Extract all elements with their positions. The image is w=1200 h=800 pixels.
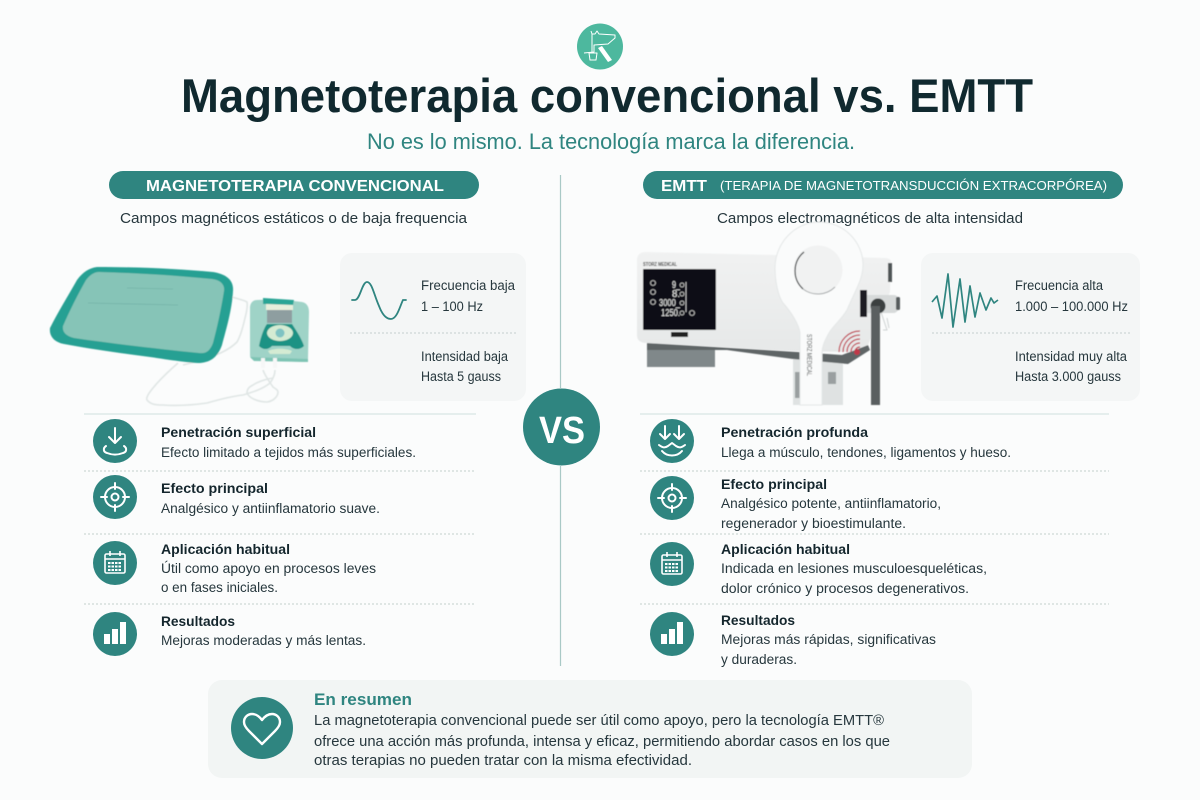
machine brand label: STORZ MEDICAL (643, 262, 677, 268)
row: penetración profunda: Penetración profunda (721, 424, 868, 440)
summary heading: En resumen (314, 690, 412, 709)
icon: high frequency wave (932, 274, 998, 327)
row: aplicación habitual: Útil como apoyo en procesos leves (161, 561, 376, 576)
row: resultados: Resultados (161, 613, 235, 629)
machine display readings: 3000_ (659, 298, 680, 309)
row: resultados (93, 612, 366, 656)
row: aplicación habitual EMTT: Indicada en lesiones musculoesqueléticas, (721, 561, 987, 576)
row: efecto principal: Efecto principal (161, 480, 268, 496)
VS badge: VS (539, 410, 585, 452)
row: aplicación habitual EMTT (650, 541, 987, 596)
row: efecto principal EMTT: regenerador y bioestimulante. (721, 516, 906, 531)
panel: magnetoterapia convencional (50, 171, 526, 656)
row: resultados EMTT: Mejoras más rápidas, significativas (721, 632, 936, 647)
row: resultados EMTT: y duraderas. (721, 652, 797, 667)
icon: target (650, 476, 694, 520)
machine display readings: 1250. (661, 308, 680, 319)
text: intensidad baja (421, 349, 508, 384)
text: intensidad baja: Intensidad baja (421, 349, 508, 364)
row: aplicación habitual EMTT: dolor crónico y procesos degenerativos. (721, 581, 969, 596)
subheading: campos magnéticos: Campos magnéticos estáticos o de baja frequencia (120, 210, 468, 227)
summary text: La magnetoterapia convencional puede ser útil como apoyo, pero la tecnología EMTT® (314, 713, 884, 729)
text: intensidad muy alta: Intensidad muy alta (1015, 349, 1127, 364)
row: efecto principal EMTT: Analgésico potente, antiinflamatorio, (721, 496, 941, 511)
panel: en resumen (208, 680, 972, 778)
logo (577, 24, 623, 70)
title: Magnetoterapia convencional vs. EMTT (181, 69, 1033, 122)
text: intensidad muy alta (1015, 349, 1127, 384)
panel: EMTT (637, 171, 1140, 667)
text: frecuencia baja: 1 – 100 Hz (421, 299, 483, 314)
machine display readings: 9_ (672, 280, 680, 291)
panel: frecuencia e intensidad baja (340, 253, 526, 401)
text: intensidad muy alta: Hasta 3.000 gauss (1015, 369, 1121, 384)
subheading: campos electromagnéticos: Campos electromagnéticos de alta intensidad (717, 210, 1023, 227)
text: frecuencia alta (1015, 278, 1128, 314)
summary text (314, 713, 890, 769)
text: frecuencia baja: Frecuencia baja (421, 278, 515, 293)
text: intensidad baja: Hasta 5 gauss (421, 369, 501, 384)
row: efecto principal: Analgésico y antiinflamatorio suave. (161, 501, 380, 516)
text: frecuencia alta: Frecuencia alta (1015, 278, 1103, 293)
subtitle: No es lo mismo. La tecnología marca la diferencia. (367, 129, 855, 154)
heading pill: EMTT: EMTT (661, 178, 707, 195)
device: EMTT machine with applicator: STORZ MEDICAL (805, 334, 812, 376)
row: penetración superficial: Efecto limitado a tejidos más superficiales. (161, 445, 416, 460)
icon: bar chart (650, 612, 694, 656)
row: penetración superficial: Penetración superficial (161, 424, 316, 440)
heading pill: EMTT: (TERAPIA DE MAGNETOTRANSDUCCIÓN EXTRACORPÓREA) (720, 178, 1107, 193)
heading pill: magnetoterapia convencional (109, 171, 479, 199)
row: aplicación habitual: o en fases iniciales. (161, 580, 278, 595)
icon: calendar (93, 541, 137, 585)
row: aplicación habitual (93, 541, 376, 595)
row: penetración superficial (93, 419, 416, 463)
icon: arrows into waves (650, 419, 694, 463)
device: magnetic pad and controller (50, 267, 309, 405)
VS badge (523, 388, 600, 466)
row: resultados: Mejoras moderadas y más lentas. (161, 633, 366, 648)
icon: target (93, 475, 137, 519)
row: aplicación habitual EMTT: Aplicación habitual (721, 541, 850, 557)
heading pill: magnetoterapia convencional: MAGNETOTERAPIA CONVENCIONAL (146, 178, 444, 195)
row: efecto principal (93, 475, 380, 519)
center divider (560, 175, 562, 666)
row: aplicación habitual: Aplicación habitual (161, 541, 290, 557)
machine display readings (650, 280, 694, 319)
row: efecto principal EMTT: Efecto principal (721, 476, 827, 492)
row: penetración profunda (650, 419, 1011, 463)
machine display readings: 8. (672, 289, 680, 300)
icon: arrow down into surface (93, 419, 137, 463)
device: EMTT machine with applicator (637, 222, 900, 405)
text: frecuencia alta: 1.000 – 100.000 Hz (1015, 299, 1128, 314)
row: efecto principal EMTT (650, 476, 941, 531)
summary text: ofrece una acción más profunda, intensa y eficaz, permitiendo abordar casos en los que (314, 734, 890, 750)
row: penetración profunda: Llega a músculo, tendones, ligamentos y hueso. (721, 445, 1011, 460)
applicator ring and handle (775, 222, 863, 405)
panel: frecuencia e intensidad alta (921, 253, 1140, 401)
icon: calendar (650, 542, 694, 586)
row: resultados EMTT (650, 612, 936, 667)
text: frecuencia baja (421, 278, 515, 314)
icon: low frequency wave (352, 282, 406, 319)
heading pill: EMTT (643, 171, 1123, 199)
icon: heart (231, 697, 293, 759)
summary text: otras terapias no pueden tratar con la misma efectividad. (314, 753, 692, 769)
icon: bar chart (93, 612, 137, 656)
row: resultados EMTT: Resultados (721, 612, 795, 628)
